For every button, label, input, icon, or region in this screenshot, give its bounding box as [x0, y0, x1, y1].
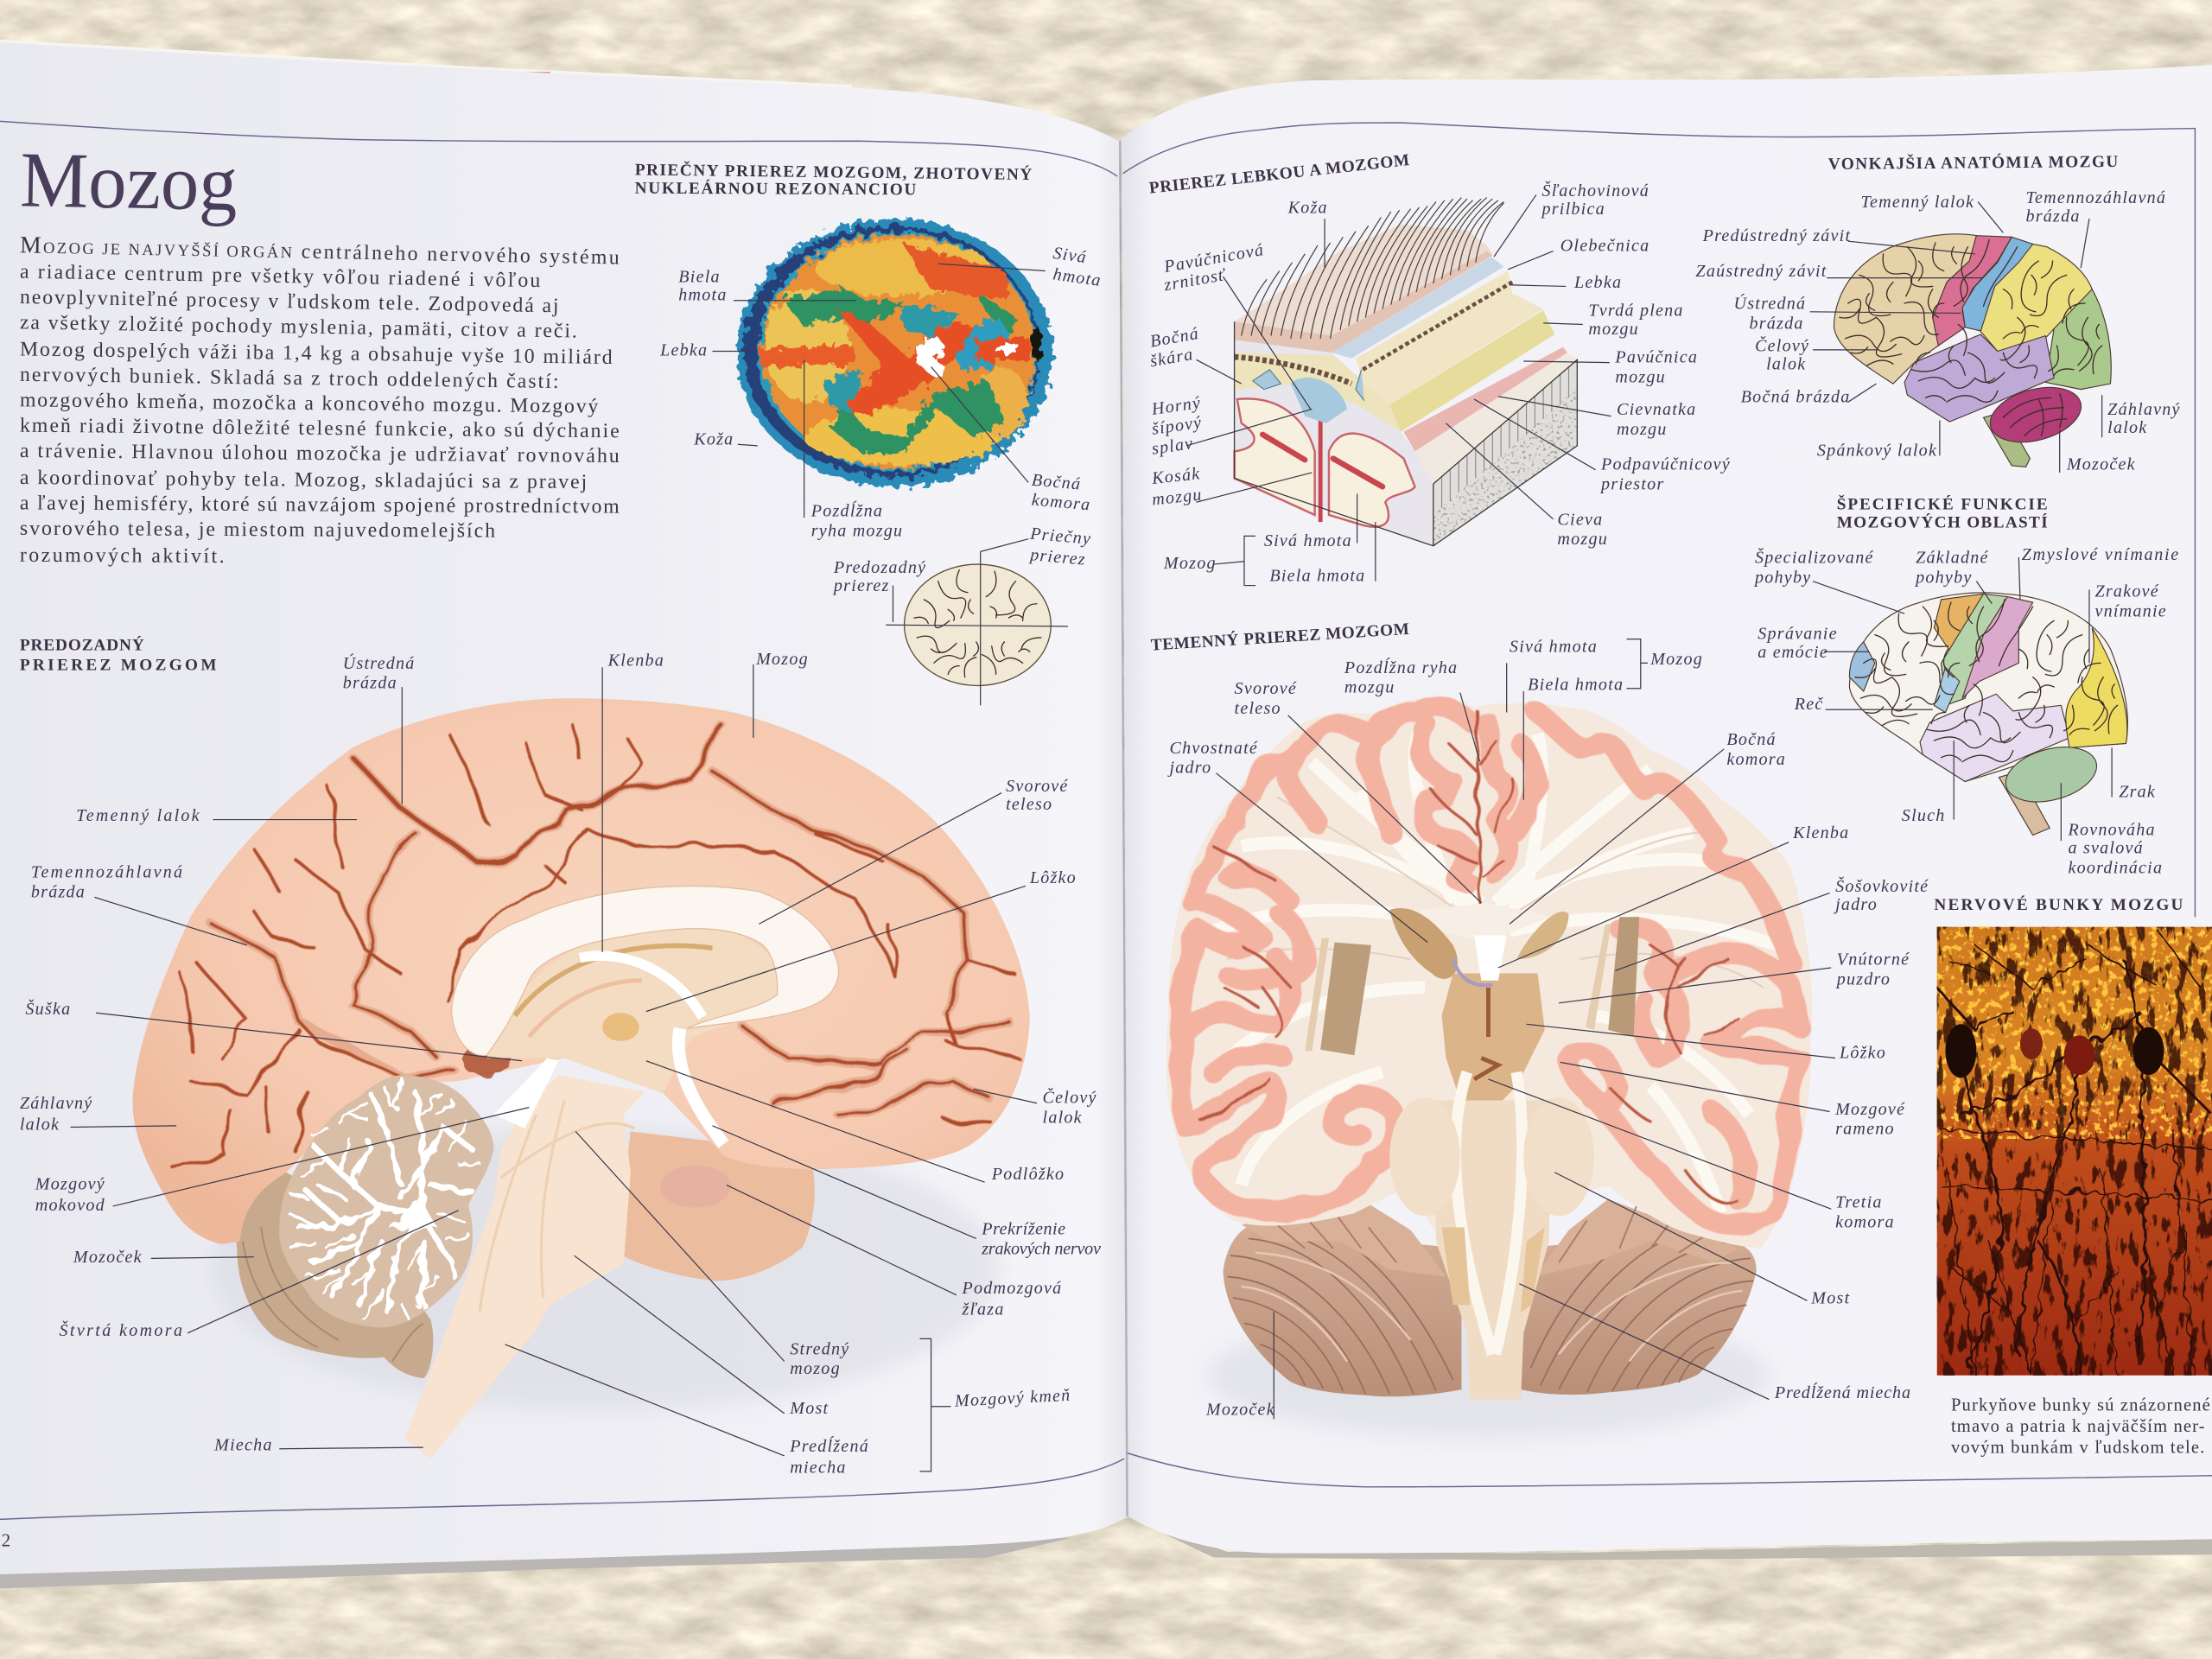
diagram: external anatomy colored brain	[1834, 234, 2111, 467]
labels: skull block: Olebečnica	[1560, 237, 1649, 256]
labels: skull block: mozgu	[1617, 420, 1668, 439]
sulci	[1432, 709, 1511, 903]
cerebrum	[132, 698, 1030, 1244]
brain white matter	[1235, 398, 1315, 515]
labels: coronal brain: Mozog	[1649, 650, 1703, 669]
labels: external anatomy: Spánkový lalok	[1817, 441, 1937, 460]
fornix	[580, 956, 702, 1017]
frontal lobe	[1834, 234, 1976, 384]
label: left callouts: Šuška	[25, 998, 71, 1019]
text block: introduction: za všetky zložité pochody myslenia, pamäti, citov a reči.	[20, 311, 577, 343]
labels: coronal brain: Mozoček	[1205, 1401, 1275, 1420]
label: left callouts: Temennozáhlavná	[31, 863, 183, 882]
labels: external anatomy: lalok	[1766, 355, 1806, 374]
label: left callouts: Mozoček	[73, 1248, 143, 1267]
labels: skull block: splav	[1151, 434, 1195, 459]
label: brain stem group: mozog	[790, 1359, 841, 1378]
right face	[1433, 359, 1577, 546]
labels: functional areas: Špecializované	[1755, 546, 1874, 567]
dark recess	[463, 1044, 511, 1077]
label: left callouts	[20, 806, 529, 1454]
label: upper callouts: brázda	[343, 674, 397, 693]
label: right callouts: Prekríženie	[981, 1220, 1066, 1239]
cortex band	[1180, 708, 1799, 1224]
labels: coronal brain: rameno	[1835, 1120, 1895, 1139]
label: brain stem group: miecha	[790, 1458, 847, 1477]
labels: coronal brain: teleso	[1235, 699, 1281, 718]
motor areas	[1934, 594, 1984, 658]
labels: functional areas: Správanie	[1758, 625, 1838, 644]
text block: introduction: Mozog dospelých váži iba 1,4 kg a obsahuje vyše 10 miliárd	[20, 338, 613, 369]
label: brain stem group: Stredný	[790, 1339, 849, 1358]
temporal lobe	[616, 1131, 815, 1281]
labels: external anatomy: brázda	[1749, 314, 1804, 333]
text block: introduction: kmeň riadi životne dôležité telesné funkcie, ako sú dýchanie	[20, 415, 620, 442]
labels: sagittal brain	[20, 650, 1102, 1477]
labels: functional areas: koordinácia	[2068, 859, 2163, 878]
labels: external anatomy: Bočná brázda	[1741, 387, 1850, 406]
labels: skull block: Šľachovinová	[1541, 180, 1649, 200]
heading: sagittal section: PRIEREZ MOZGOM	[20, 657, 217, 675]
labels: skull block: Cievnatka	[1617, 400, 1696, 419]
labels: section planes: prierez	[1027, 545, 1087, 569]
labels: coronal brain: Vnútorné	[1837, 950, 1910, 969]
text block: Purkinje caption: vovým bunkám v ľudskom tele.	[1951, 1439, 2205, 1458]
labels: functional areas: Základné	[1916, 548, 1989, 567]
labels: skull block: zrnitosť	[1162, 265, 1228, 295]
sulci	[172, 725, 1021, 1166]
label: upper callouts: Mozog	[755, 650, 809, 669]
labels: skull block: Bočná	[1148, 324, 1201, 352]
title: Mozog	[20, 136, 238, 227]
labels: functional areas: a svalová	[2068, 839, 2144, 858]
brainstem	[405, 1075, 645, 1459]
label: upper callouts: Klenba	[607, 652, 664, 671]
labels: skull block: Lebka	[1573, 273, 1622, 292]
cerebellum outer	[236, 1173, 433, 1378]
text block: introduction: a ľavej hemisféry, ktoré sú navzájom spojené prostredníctvom	[20, 492, 620, 518]
labels: skull block: Horný	[1150, 393, 1202, 419]
label: brain stem group	[505, 1131, 1071, 1477]
labels: MRI scan: Biela	[678, 268, 721, 287]
labels: coronal brain: Šošovkovité	[1835, 875, 1929, 896]
labels: coronal brain: Most	[1810, 1289, 1850, 1308]
soft shadow	[212, 1128, 1001, 1411]
temporal lobe	[1904, 334, 2054, 422]
white matter fibers	[1213, 734, 1777, 1213]
labels: external anatomy: Zaústredný závit	[1695, 262, 1827, 281]
label: brain stem group: Predĺžená	[789, 1435, 869, 1456]
cerebellum arbor	[279, 1075, 493, 1327]
label: right callouts: Podmozgová	[961, 1279, 1062, 1298]
labels: MRI scan: Sivá	[1052, 244, 1088, 267]
heading: MRI: PRIEČNY PRIEREZ MOZGOM, ZHOTOVENÝ	[635, 160, 1033, 184]
chart: MRI scan	[736, 219, 1052, 486]
diagram: functional areas brain	[1849, 593, 2127, 836]
front face	[1235, 340, 1433, 546]
text block: Purkinje caption: tmavo a patria k najväčším ner-	[1951, 1417, 2206, 1436]
text block: introduction: neovplyvniteľné procesy v ľudskom tele. Zodpovedá aj	[20, 286, 559, 317]
corpus callosum	[451, 886, 839, 1056]
heading: nerve cells: NERVOVÉ BUNKY MOZGU	[1934, 895, 2183, 914]
panel: left page	[0, 42, 1128, 1574]
labels: functional areas: Zmyslové vnímanie	[2022, 545, 2179, 564]
labels: MRI scan: komora	[1031, 491, 1091, 514]
labels: MRI scan: Bočná	[1031, 471, 1082, 494]
corpus callosum	[1382, 903, 1552, 938]
labels: section planes	[832, 524, 1092, 595]
heading: skull section: PRIEREZ LEBKOU A MOZGOM	[1148, 151, 1411, 198]
label: right callouts: lalok	[1043, 1109, 1083, 1128]
chart: sagittal brain model	[132, 698, 1030, 1459]
stem	[1432, 1100, 1552, 1400]
diagram: skull and brain layers block	[1235, 198, 1577, 546]
labels: MRI scan: ryha mozgu	[811, 521, 903, 540]
labels: coronal brain: jadro	[1166, 759, 1211, 778]
speech and emotion	[1849, 642, 1875, 691]
labels: section planes: prierez	[832, 576, 890, 595]
labels: MRI scan: Pozdĺžna	[810, 500, 883, 521]
labels: coronal brain: Biela hmota	[1528, 675, 1624, 694]
labels: coronal brain: Mozgové	[1834, 1100, 1905, 1119]
labels: coronal brain: Chvostnaté	[1169, 739, 1258, 758]
labels: skull block: Kosák	[1150, 464, 1201, 488]
soft shadow	[1206, 1312, 1770, 1439]
text block: introduction: a koordinovať pohyby tela. Mozog, skladajúci sa z pravej	[20, 467, 587, 493]
parietal lobe	[1980, 244, 2092, 352]
cerebellum	[1999, 738, 2103, 811]
label: brain stem group: Mozgový kmeň	[953, 1386, 1071, 1411]
labels: external anatomy: lalok	[2107, 418, 2147, 437]
label: left callouts: mokovod	[35, 1196, 105, 1215]
labels: skull block: Mozog	[1163, 554, 1217, 573]
labels: skull block: Pavúčnicová	[1162, 240, 1266, 276]
labels: MRI scan: Koža	[693, 429, 734, 448]
heading: external anatomy: VONKAJŠIA ANATÓMIA MOZGU	[1828, 152, 2119, 174]
labels: external anatomy: brázda	[2025, 207, 2081, 226]
labels: skull block: priestor	[1599, 475, 1664, 494]
labels: skull block: Biela hmota	[1269, 567, 1365, 586]
labels: functional areas: Reč	[1794, 695, 1824, 714]
text block: introduction: mozgového kmeňa, mozočka a koncového mozgu. Mozgový	[20, 389, 599, 418]
labels: skull block: mozgu	[1557, 530, 1608, 549]
labels: skull block: Tvrdá plena	[1588, 302, 1684, 321]
label: left callouts: Miecha	[213, 1435, 273, 1454]
labels: functional areas: Sluch	[1902, 806, 1946, 825]
label: right callouts	[646, 777, 1102, 1319]
labels: external anatomy	[1695, 188, 2181, 474]
text block: Purkinje caption: Purkyňove bunky sú znázornené	[1951, 1396, 2211, 1415]
occipital lobe	[2045, 289, 2111, 390]
labels: external anatomy: Záhlavný	[2107, 400, 2181, 419]
diagram: top view of brain	[886, 539, 1068, 705]
labels: coronal brain: Predĺžená miecha	[1774, 1382, 1911, 1402]
labels: skull block: Koža	[1287, 199, 1328, 218]
labels: functional areas	[1753, 545, 2179, 878]
labels: coronal brain: komora	[1835, 1212, 1895, 1231]
text block: introduction: a riadiace centrum pre všetky vôľou riadené i vôľou	[20, 261, 541, 292]
labels: coronal brain: Lôžko	[1839, 1043, 1886, 1062]
labels: functional areas: pohyby	[1914, 568, 1972, 587]
text block: introduction: rozumových aktivít.	[20, 544, 225, 568]
labels: coronal brain	[1166, 637, 1929, 1420]
label: right callouts: zrakových nervov	[981, 1239, 1102, 1258]
cerebellum folia	[1227, 1216, 1753, 1394]
label: left callouts: brázda	[31, 882, 86, 901]
labels: skull block: Podpavúčnicový	[1600, 455, 1731, 474]
labels: skull block: Pavúčnica	[1614, 348, 1698, 367]
heading: coronal section: TEMENNÝ PRIEREZ MOZGOM	[1150, 620, 1410, 655]
chart: coronal brain model	[1166, 696, 1812, 1439]
labels: external anatomy: Ústredná	[1734, 293, 1806, 314]
labels: functional areas: Zrak	[2119, 782, 2156, 801]
pituitary	[660, 1166, 731, 1208]
folia upper	[1242, 1202, 1446, 1277]
labels: functional areas: Zrakové	[2094, 582, 2159, 601]
labels: MRI scan: hmota	[1052, 264, 1103, 290]
caudate nucleus	[1389, 908, 1458, 979]
label: right callouts: Lôžko	[1029, 868, 1077, 887]
cerebellum right	[1521, 1220, 1757, 1395]
labels: coronal brain: Pozdĺžna ryha	[1344, 657, 1458, 677]
labels: skull block: mozgu	[1588, 320, 1639, 339]
gutter line	[1120, 141, 1127, 1516]
label: right callouts: Podlôžko	[991, 1165, 1065, 1184]
labels: MRI scan: hmota	[678, 286, 728, 305]
thalamus	[1442, 974, 1545, 1108]
heading: specific functions: ŠPECIFICKÉ FUNKCIE	[1837, 494, 2049, 513]
labels: external anatomy: Čelový	[1755, 335, 1809, 356]
skin dome	[1235, 225, 1492, 344]
heading: sagittal section	[20, 636, 217, 675]
heading: MRI: NUKLEÁRNOU REZONANCIOU	[635, 179, 917, 199]
heading: MRI	[635, 160, 1033, 199]
labels: coronal brain: Svorové	[1235, 679, 1297, 698]
labels: section planes: Predozadný	[833, 558, 926, 577]
text block: Purkinje caption	[1951, 1396, 2211, 1458]
layers	[1332, 257, 1503, 359]
labels: external anatomy: Temenný lalok	[1860, 193, 1974, 212]
text block: introduction: a trávenie. Hlavnou úlohou mozočka je udržiavať rovnováhu	[20, 440, 620, 467]
visual area	[2066, 628, 2127, 747]
labels: section planes: Priečny	[1028, 524, 1092, 549]
labels: functional areas: a emócie	[1758, 643, 1828, 662]
labels: skull block	[1148, 180, 1731, 586]
labels: coronal brain: Tretia	[1835, 1193, 1883, 1212]
label: left callouts: Štvrtá komora	[60, 1319, 183, 1340]
labels: external anatomy: Temennozáhlavná	[2025, 188, 2166, 207]
inner diencephalon	[486, 924, 786, 1093]
labels: coronal brain: komora	[1726, 750, 1786, 769]
label: brain stem group: Most	[789, 1399, 829, 1418]
hairs	[1242, 198, 1503, 339]
labels: coronal brain: jadro	[1833, 895, 1878, 914]
image: Purkinje cells	[1937, 927, 2212, 1376]
label: right callouts: Čelový	[1043, 1087, 1097, 1108]
labels: skull block: Cieva	[1557, 510, 1603, 529]
precentral gyrus	[1933, 236, 2012, 346]
sinus	[1291, 378, 1347, 423]
text block: introduction	[20, 232, 620, 568]
postcentral gyrus	[1962, 237, 2033, 332]
label: left callouts: Temenný lalok	[76, 806, 200, 825]
labels: coronal brain: puzdro	[1835, 970, 1891, 989]
labels: coronal brain: Bočná	[1726, 730, 1777, 749]
labels: MRI scan: Lebka	[659, 340, 708, 359]
label: right callouts: žľaza	[961, 1300, 1005, 1319]
labels: coronal brain: Klenba	[1792, 823, 1849, 842]
labels: functional areas: Rovnováha	[2067, 821, 2156, 840]
labels: MRI scan	[659, 244, 1103, 540]
labels: external anatomy: Mozoček	[2066, 455, 2136, 474]
lentiform nucleus	[1320, 943, 1371, 1055]
labels: skull block: mozgu	[1151, 485, 1204, 509]
panel: right page	[1122, 65, 2212, 1554]
text block: introduction: MOZOG JE NAJVYŠŠÍ ORGÁN centrálneho nervového systému	[20, 232, 620, 270]
labels: functional areas: vnímanie	[2094, 601, 2167, 620]
label: upper callouts	[343, 650, 809, 952]
label: left callouts: Záhlavný	[20, 1094, 92, 1113]
labels: external anatomy: Predústredný závit	[1702, 226, 1851, 245]
labels: skull block: prilbica	[1540, 200, 1605, 219]
text block: introduction: svorového telesa, je miestom najuvedomelejších	[20, 518, 495, 543]
labels: functional areas: pohyby	[1753, 568, 1811, 587]
label: left callouts: Mozgový	[35, 1174, 105, 1193]
cerebrum outline	[1166, 696, 1812, 1248]
label: upper callouts: Ústredná	[343, 652, 416, 673]
temporal area	[1920, 694, 2069, 781]
labels: skull block: mozgu	[1615, 367, 1666, 386]
cerebellum	[1984, 378, 2088, 451]
label: left callouts: lalok	[20, 1116, 60, 1135]
cerebellum left	[1224, 1216, 1461, 1396]
label: right callouts: teleso	[1006, 795, 1052, 814]
labels: skull block: šípový	[1151, 413, 1204, 439]
vertical hatch	[1442, 366, 1569, 508]
heading: specific functions	[1837, 494, 2049, 532]
stem	[1984, 412, 2030, 467]
page number: 2	[2, 1529, 10, 1550]
label: right callouts: Svorové	[1006, 777, 1069, 796]
labels: skull block: škára	[1148, 345, 1195, 371]
heading: specific functions: MOZGOVÝCH OBLASTÍ	[1837, 513, 2049, 532]
labels: skull block: Sivá hmota	[1264, 531, 1352, 550]
heading: sagittal section: PREDOZADNÝ	[20, 636, 145, 655]
labels: coronal brain: Sivá hmota	[1510, 637, 1598, 656]
text block: introduction: nervových buniek. Skladá sa z troch oddelených častí:	[20, 364, 559, 393]
labels: coronal brain: mozgu	[1344, 678, 1395, 697]
